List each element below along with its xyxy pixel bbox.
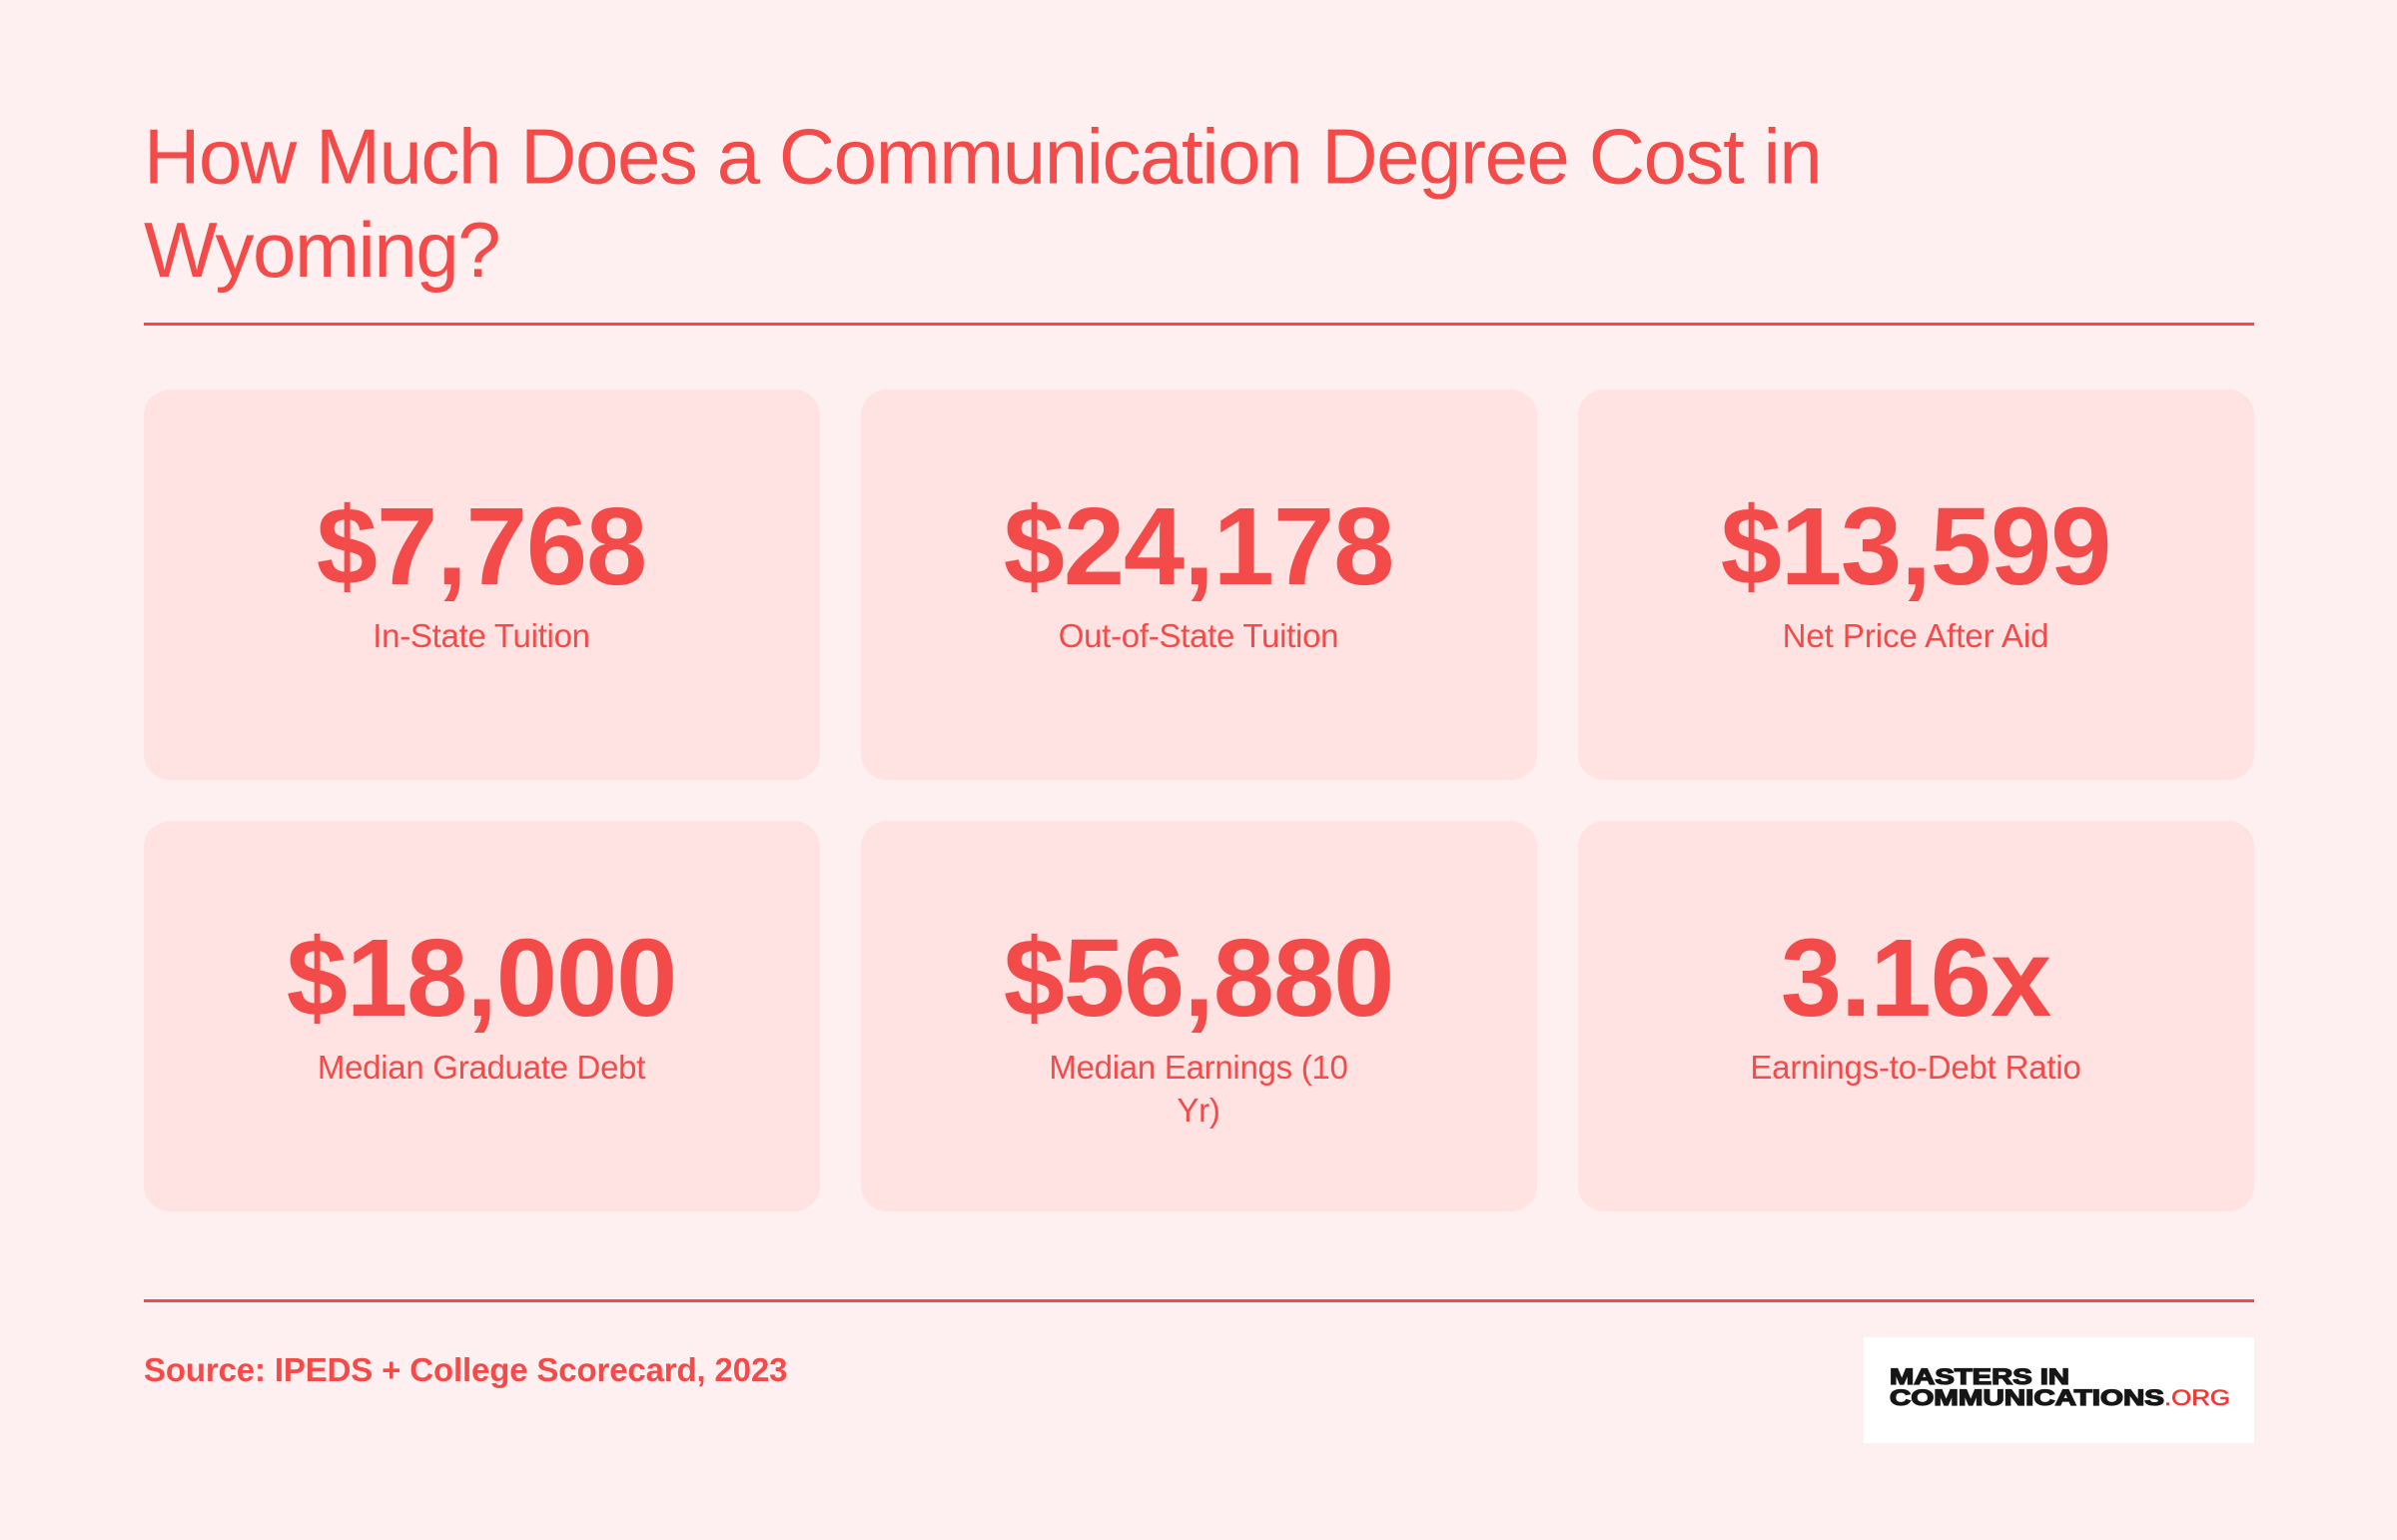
logo: MASTERS IN (1890, 1364, 2069, 1389)
logo: COMMUNICATIONS (1890, 1385, 2164, 1410)
panel: net price after aid (1578, 389, 2254, 780)
panel: median graduate debt (144, 821, 820, 1211)
source note: Source: IPEDS + College Scorecard, 2023 (144, 1351, 787, 1388)
panel: median earnings: $56,880 (1004, 917, 1393, 1040)
panel: median earnings: Yr) (1177, 1092, 1220, 1129)
logo: .ORG (2164, 1385, 2230, 1410)
panel: median graduate debt: Median Graduate Debt (318, 1049, 645, 1086)
title (144, 112, 1821, 294)
panel: out-of-state tuition: Out-of-State Tuition (1059, 617, 1338, 654)
panel: median earnings (861, 821, 1537, 1211)
title: Wyoming? (144, 206, 499, 294)
panel: earnings-to-debt ratio: Earnings-to-Debt Ratio (1750, 1049, 2081, 1086)
panel: earnings-to-debt ratio: 3.16x (1781, 917, 2051, 1040)
panel: out-of-state tuition: $24,178 (1004, 485, 1393, 608)
panel: median graduate debt: $18,000 (287, 917, 676, 1040)
title: How Much Does a Communication Degree Cost in (144, 112, 1821, 200)
panel: in-state tuition: $7,768 (317, 485, 646, 608)
panel: in-state tuition (144, 389, 820, 780)
panel: out-of-state tuition (861, 389, 1537, 780)
panel: net price after aid: $13,599 (1721, 485, 2110, 608)
panel: net price after aid: Net Price After Aid (1783, 617, 2048, 654)
logo (1864, 1337, 2254, 1443)
panel: earnings-to-debt ratio (1578, 821, 2254, 1211)
panel: median earnings: Median Earnings (10 (1049, 1049, 1348, 1086)
panel: in-state tuition: In-State Tuition (373, 617, 590, 654)
